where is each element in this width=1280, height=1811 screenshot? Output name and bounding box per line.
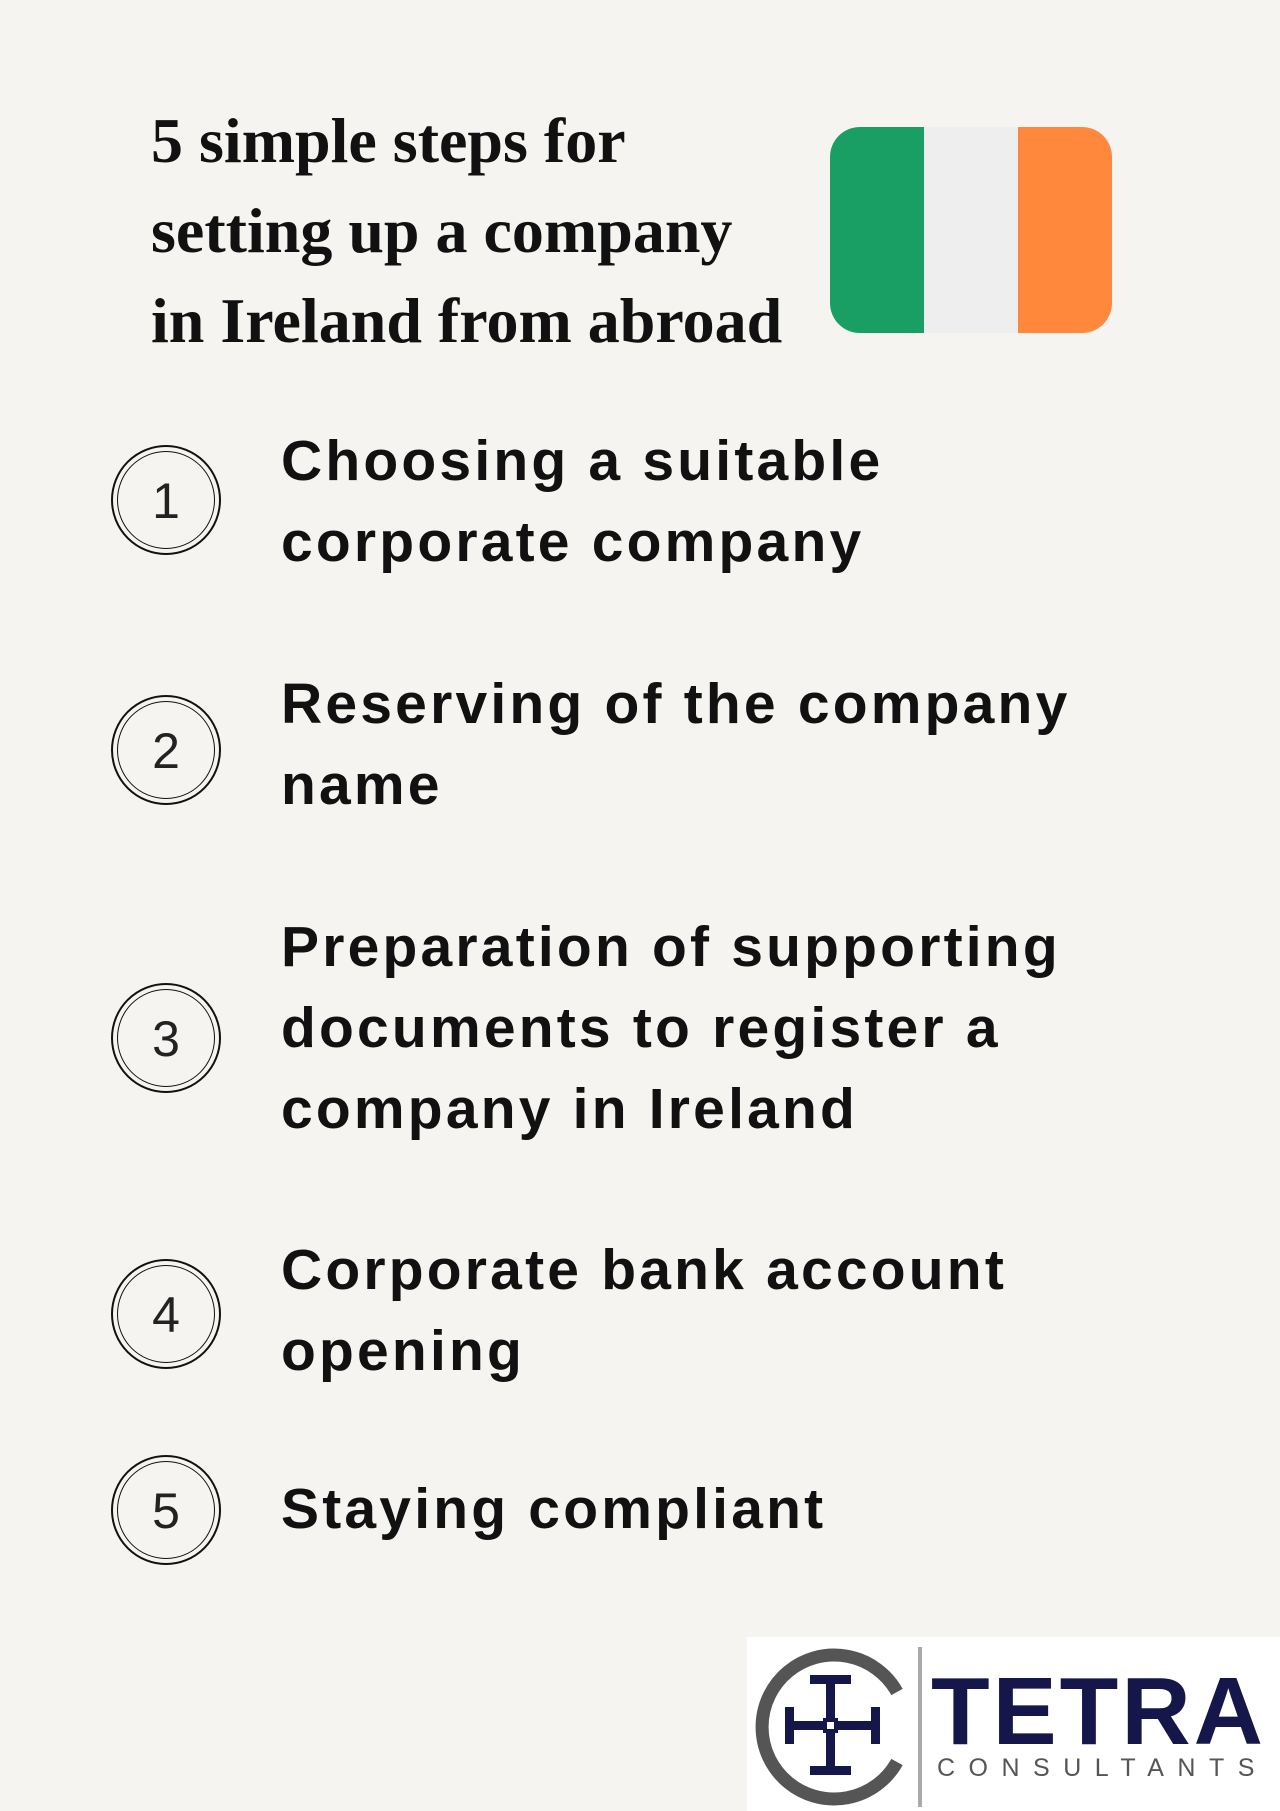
step 2 text xyxy=(281,672,1070,817)
step 3 text: company in Ireland xyxy=(281,1077,858,1141)
step 1 number: 1 xyxy=(152,473,180,529)
step 5 number: 5 xyxy=(152,1483,180,1539)
brand name: TETRA xyxy=(931,1658,1266,1765)
brand subtitle: CONSULTANTS xyxy=(937,1754,1268,1782)
step 5 number xyxy=(111,1455,221,1565)
step 4 number xyxy=(111,1259,221,1369)
step 1 text: corporate company xyxy=(281,510,864,574)
title: setting up a company xyxy=(151,195,732,266)
step 2 number: 2 xyxy=(152,723,180,779)
title: 5 simple steps for xyxy=(151,105,626,176)
step 4 number: 4 xyxy=(152,1287,180,1343)
step 4 text: Corporate bank account xyxy=(281,1238,1007,1302)
step 2 text: Reserving of the company xyxy=(281,672,1070,736)
step 3 text xyxy=(281,915,1061,1141)
step 4 text xyxy=(281,1238,1007,1383)
title: in Ireland from abroad xyxy=(151,285,782,356)
icon: irish flag xyxy=(830,127,1112,333)
step 1 number xyxy=(111,445,221,555)
step 2 text: name xyxy=(281,753,443,817)
step 1 text xyxy=(281,429,883,574)
step 3 number: 3 xyxy=(152,1011,180,1067)
step 1 text: Choosing a suitable xyxy=(281,429,883,493)
title xyxy=(151,105,782,356)
step 3 text: Preparation of supporting xyxy=(281,915,1061,979)
step 3 number xyxy=(111,983,221,1093)
step 3 text: documents to register a xyxy=(281,996,1001,1060)
logo xyxy=(747,1637,1280,1811)
step 4 text: opening xyxy=(281,1319,525,1383)
divider xyxy=(918,1647,922,1807)
step 2 number xyxy=(111,695,221,805)
step 5 text: Staying compliant xyxy=(281,1477,826,1541)
logo icon xyxy=(756,1648,903,1806)
